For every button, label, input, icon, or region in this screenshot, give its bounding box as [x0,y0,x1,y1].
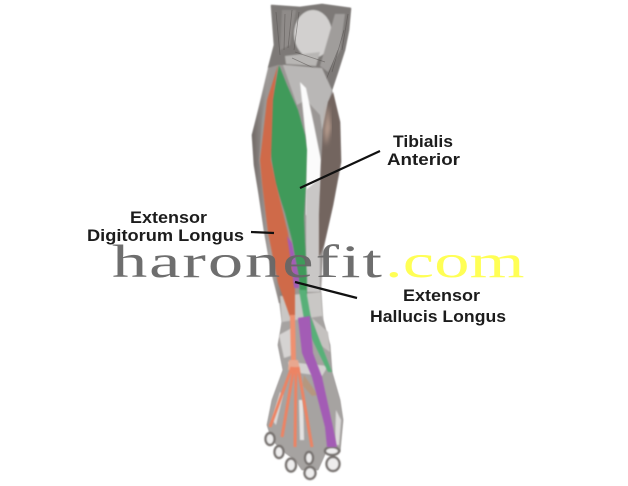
label line: extensor digitorum longus [251,232,274,233]
label: extensor digitorum longus: Digitorum Longus [87,226,244,245]
toes [266,433,340,479]
label: tibialis anterior: Anterior [387,150,460,169]
watermark: haronefit: haronefit [112,235,382,287]
label: tibialis anterior [387,132,460,169]
label line: tibialis anterior [300,151,380,188]
label: extensor digitorum longus: Extensor [130,208,207,227]
lower shin and bandage [280,292,323,332]
muscle: extensor hallucis longus (purple) [287,236,337,447]
label: tibialis anterior: Tibialis [393,132,453,151]
muscle: extensor digitorum longus (red) [260,65,312,447]
label: extensor hallucis longus: Extensor [403,286,480,305]
knee [268,4,351,90]
knee hatching [276,10,348,80]
foot [267,316,343,470]
lateral shin muscle, left [252,67,290,303]
label: extensor hallucis longus [370,286,506,326]
label: extensor hallucis longus: Hallucis Longus [370,307,506,326]
muscle: tibialis anterior (green) [270,65,332,372]
leg illustration [252,4,351,479]
label: extensor digitorum longus [87,208,244,245]
gray tibia lower [304,178,320,292]
white tibia strip [300,82,321,215]
soleus, right [319,92,341,258]
region below knee [283,65,332,130]
leg silhouette [252,4,351,470]
label line: extensor hallucis longus [295,282,357,298]
watermark: .com: .com [385,235,524,287]
